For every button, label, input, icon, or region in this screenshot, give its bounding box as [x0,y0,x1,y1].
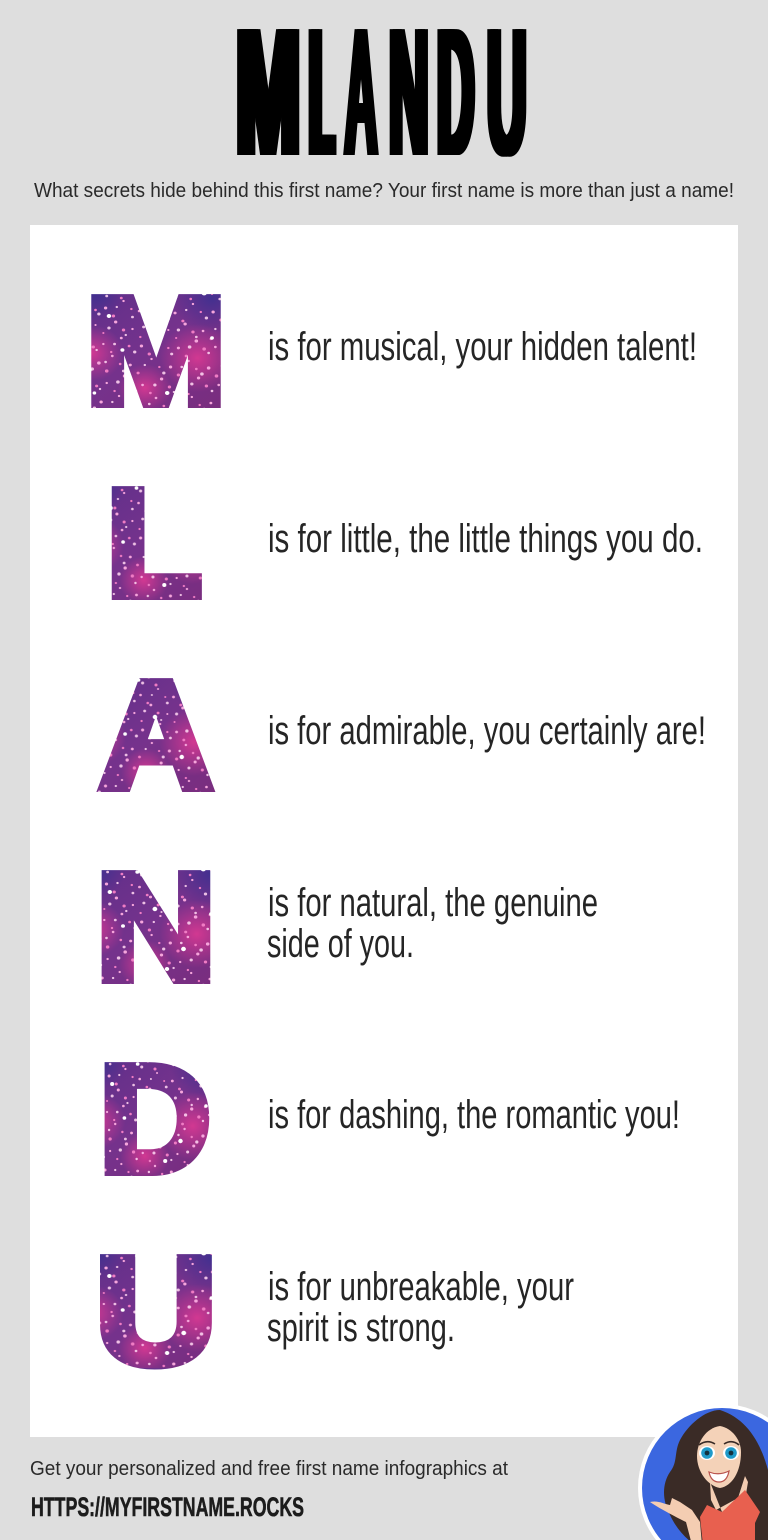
icon: avatar [638,1404,768,1540]
panel: letters card [30,225,738,1437]
title [232,0,526,194]
letter M: M [86,266,226,435]
letter N: N [96,842,216,1011]
letter A: A [100,651,212,820]
row: letter L [107,459,703,628]
subtitle: What secrets hide behind this first name? Your first name is more than just a name! [34,180,734,202]
letter U: U [95,1227,217,1395]
text: N meaning: is for natural, the genuine [268,881,598,925]
footer url: HTTPS://MYFIRSTNAME.ROCKS [31,1492,304,1522]
text: U meaning: spirit is strong. [267,1306,455,1350]
letter L: L [107,459,201,628]
footer text: Get your personalized and free first name infographics at [30,1458,508,1480]
row: letter D [99,1035,680,1204]
text: N meaning [267,881,598,966]
row: letter M [86,266,697,435]
text: U meaning: is for unbreakable, your [268,1265,574,1309]
row: letter N [96,842,598,1011]
row: letter A [100,651,706,820]
letter D: D [99,1035,211,1204]
text: U meaning [267,1265,574,1350]
text: N meaning: side of you. [267,922,414,966]
row: letter U [95,1227,574,1395]
